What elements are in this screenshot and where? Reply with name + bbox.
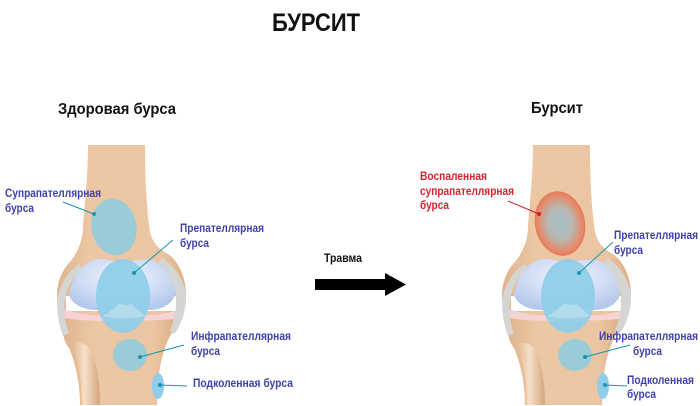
label: inflamed suprapatellar bursa	[420, 169, 514, 212]
prepatellar bursa	[96, 259, 150, 333]
label: suprapatellar bursa	[5, 186, 101, 215]
label: suprapatellar bursa: бурса	[5, 201, 34, 215]
label: infrapatellar bursa, right	[599, 329, 698, 358]
label: infrapatellar bursa, right: бурса	[633, 344, 662, 358]
label: prepatellar bursa, right	[614, 228, 698, 257]
label: suprapatellar bursa: Супрапателлярная	[5, 186, 101, 200]
label: infrapatellar bursa	[191, 329, 291, 358]
label: inflamed suprapatellar bursa: супрапателлярная	[420, 184, 514, 198]
red leader line	[508, 201, 540, 216]
label: popliteal bursa: Подколенная бурса	[193, 376, 293, 390]
suprapatellar bursa	[87, 195, 141, 259]
heading: healthy bursa: Здоровая бурса	[58, 101, 176, 118]
label: prepatellar bursa, right: бурса	[614, 243, 643, 257]
heading: bursitis: Бурсит	[531, 100, 583, 117]
popliteal bursa	[152, 373, 164, 399]
infrapatellar bursa	[113, 339, 147, 371]
arrow	[315, 273, 406, 296]
label: prepatellar bursa: Препателлярная	[180, 221, 264, 235]
inflamed suprapatellar bursa	[529, 187, 591, 260]
label: injury: Травма	[324, 251, 362, 265]
label: popliteal bursa, right: бурса	[627, 387, 656, 401]
label: infrapatellar bursa: бурса	[191, 344, 220, 358]
knee illustration: bursitis	[502, 145, 631, 405]
label: inflamed suprapatellar bursa: Воспаленная	[420, 169, 487, 183]
knee illustration: healthy	[57, 145, 186, 405]
label: popliteal bursa, right	[627, 373, 694, 401]
label: prepatellar bursa	[180, 221, 264, 250]
label: inflamed suprapatellar bursa: бурса	[420, 198, 449, 212]
leader lines: bursitis knee	[578, 242, 630, 386]
label: prepatellar bursa: бурса	[180, 236, 209, 250]
label: infrapatellar bursa: Инфрапателлярная	[191, 329, 291, 343]
title: БУРСИТ	[272, 9, 360, 37]
leader lines: healthy knee	[63, 202, 187, 386]
